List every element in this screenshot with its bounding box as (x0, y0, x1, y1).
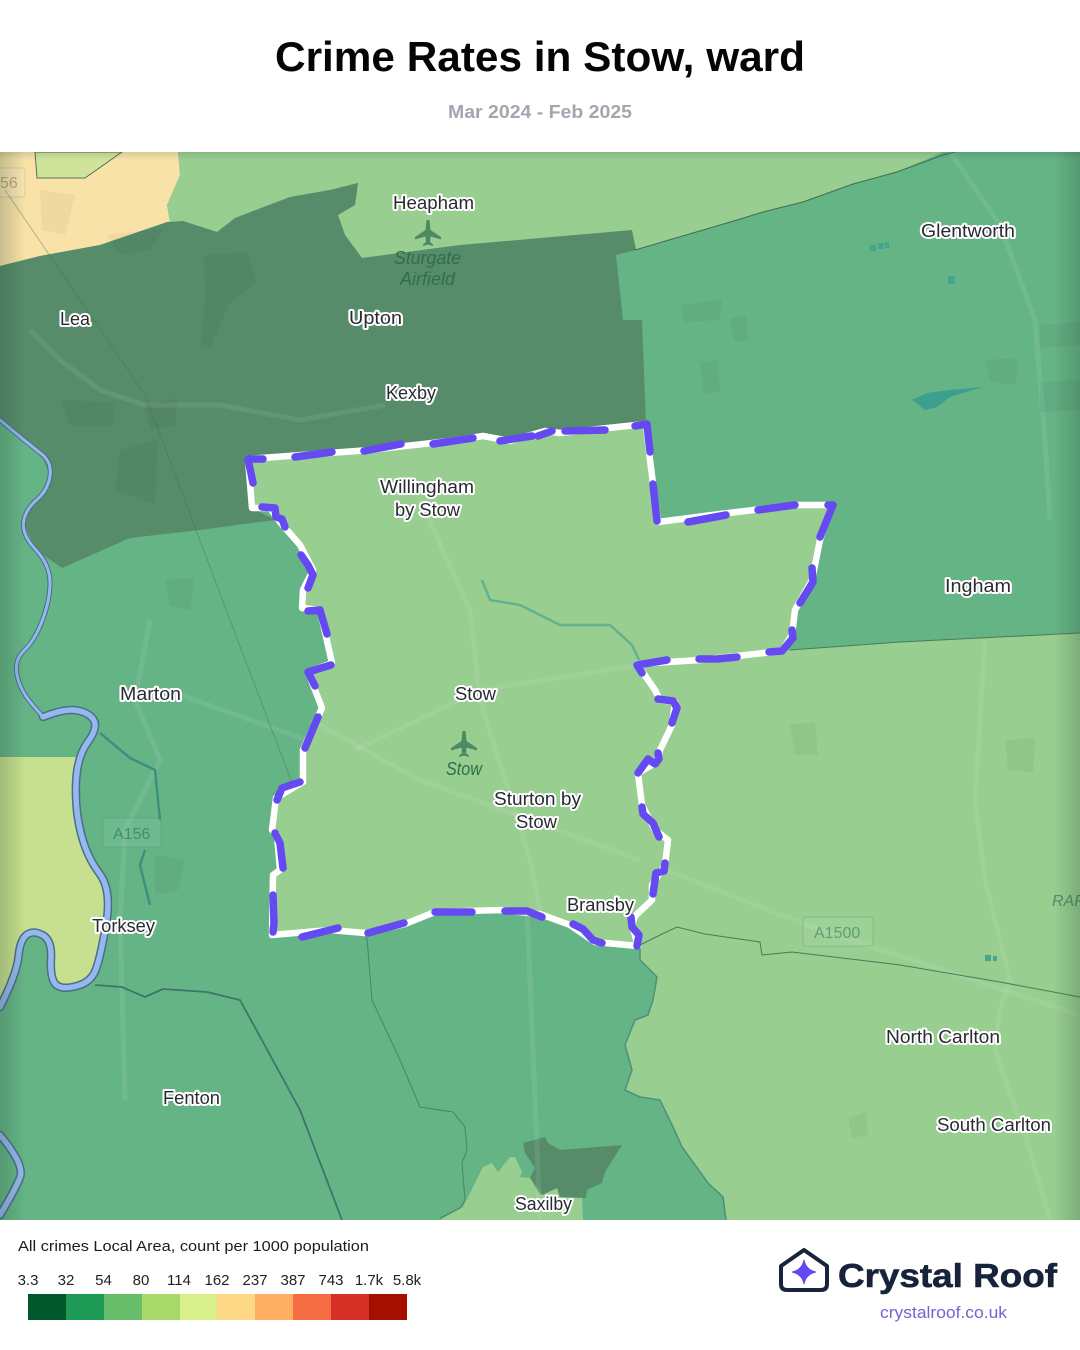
region boundary line north-east (635, 152, 955, 250)
map labels: Fenton (163, 1088, 220, 1108)
map labels: Sturgate (394, 248, 461, 268)
logo: Crystal Roof (781, 1250, 1058, 1322)
legend tick labels: 114 (167, 1272, 191, 1289)
legend tick labels: 5.8k (393, 1272, 422, 1289)
map labels: Kexby (386, 383, 436, 403)
map labels (60, 193, 1080, 1214)
legend tick labels: 162 (204, 1272, 230, 1289)
region: light green north (Heapham) (167, 152, 943, 258)
road shield: 56 (0, 168, 25, 197)
map labels: Stow (516, 812, 558, 832)
road shield: A156: A156 (113, 826, 150, 843)
small ponds (870, 242, 997, 961)
subtitle: date range: Mar 2024 - Feb 2025 (448, 102, 632, 122)
logo wordmark: Crystal Roof (838, 1257, 1058, 1294)
map labels: Heapham (393, 193, 474, 213)
region: light green Saxilby (440, 1157, 583, 1220)
map base: mid green areas (0, 152, 1080, 1220)
legend colour scale (28, 1294, 407, 1320)
map labels: Stow (455, 684, 497, 704)
map labels: Ingham (945, 576, 1011, 596)
map labels: Glentworth (921, 221, 1015, 241)
choropleth map (0, 152, 1080, 1220)
map labels: Saxilby (515, 1194, 572, 1214)
river Trent (0, 420, 108, 1215)
railway line (5, 190, 367, 940)
map labels: Stow (446, 759, 483, 779)
ward roads (309, 687, 518, 818)
stream near A156 (100, 733, 160, 905)
stream: south-east boundary (625, 946, 726, 1220)
ward boundary: purple dashes (248, 424, 833, 946)
map labels: Airfield (399, 269, 456, 289)
legend tick labels: 54 (95, 1272, 112, 1289)
icon: Stow airfield plane (451, 731, 477, 757)
map labels: Lea (60, 309, 91, 329)
legend (18, 1238, 422, 1320)
stow ward area (248, 424, 832, 946)
region: dark green Saxilby patch (523, 1137, 622, 1198)
road shield: A156 (103, 818, 161, 847)
canal to the south-west (95, 985, 342, 1220)
legend tick labels: 3.3 (18, 1272, 38, 1289)
map edge vignette (0, 152, 1080, 1220)
ward stream (482, 580, 640, 662)
map labels: by Stow (395, 500, 461, 520)
stream: boundary to the south (367, 938, 467, 1218)
region boundary east (790, 633, 1080, 650)
map labels: Torksey (92, 916, 155, 936)
map labels: South Carlton (937, 1115, 1051, 1135)
map labels: Bransby (567, 895, 634, 915)
ward boundary: white line (248, 424, 832, 946)
legend tick labels: 743 (318, 1272, 344, 1289)
legend tick labels: 32 (58, 1272, 74, 1289)
region: light green east (620, 633, 1080, 1220)
legend tick labels: 237 (242, 1272, 268, 1289)
lake near Glentworth (912, 387, 983, 410)
region: small yellow-green north-west (35, 152, 122, 178)
legend tick labels: 1.7k (355, 1272, 384, 1289)
legend tick labels: 387 (280, 1272, 306, 1289)
legend title: All crimes Local Area, count per 1000 population (18, 1238, 369, 1255)
road network (30, 152, 1080, 1220)
region: yellow-green west of river (0, 757, 108, 1007)
website url: crystalroof.co.uk (880, 1304, 1008, 1322)
region: dark green north (Upton, Kexby) (0, 183, 646, 568)
icon: house with star (781, 1250, 827, 1290)
field patches (40, 190, 1080, 1138)
map labels: Willingham (380, 477, 474, 497)
map labels: Upton (349, 308, 402, 328)
legend tick labels: 80 (133, 1272, 149, 1289)
road shield: 56: 56 (0, 175, 18, 192)
title: Crime Rates in Stow, ward (275, 33, 805, 80)
map labels: Marton (120, 684, 181, 704)
map labels: Sturton by (494, 789, 581, 809)
road shield: A1500: A1500 (814, 925, 860, 942)
icon: Sturgate airfield plane (415, 220, 441, 246)
legend tick labels (18, 1272, 422, 1289)
road shield: A1500 (803, 917, 873, 946)
map labels: North Carlton (886, 1027, 1000, 1047)
region: beige north-west (0, 152, 180, 266)
stream: east boundary (640, 927, 1080, 997)
